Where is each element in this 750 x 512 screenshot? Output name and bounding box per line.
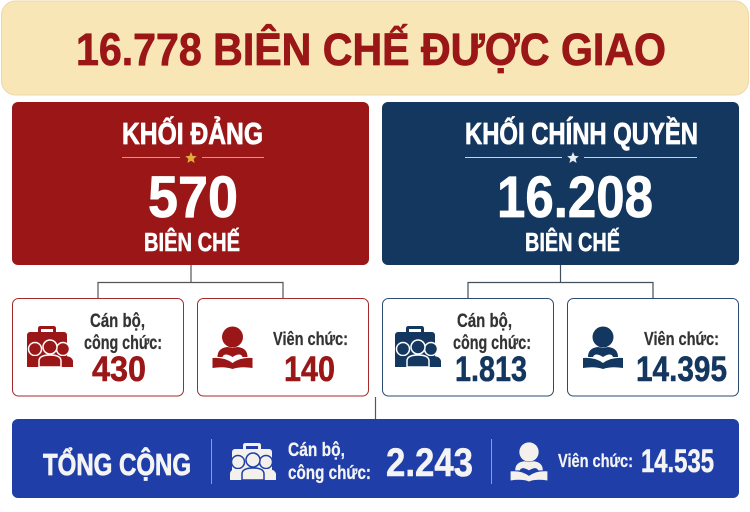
number: 570: 570 (148, 165, 238, 230)
card: Chính quyền viên chức (568, 298, 738, 396)
value: 2.243 (386, 441, 473, 485)
label: biên chế: BIÊN CHẾ (144, 227, 240, 257)
star divider (122, 152, 264, 163)
icon: briefcase with people (230, 443, 276, 480)
connector: Khối Đảng (98, 265, 283, 298)
icon: reader (583, 326, 623, 369)
label: công chức: (84, 333, 162, 354)
value: 430 (92, 350, 146, 389)
connector: total (374, 397, 376, 419)
label (84, 311, 162, 354)
icon: reader (212, 326, 252, 369)
card: Chính quyền cán bộ công chức (382, 298, 554, 396)
label (288, 439, 371, 484)
divider (211, 439, 212, 484)
panel: Khối Chính quyền (382, 102, 739, 265)
label: biên chế: BIÊN CHẾ (525, 227, 620, 257)
card: Đảng viên chức (198, 298, 368, 396)
panel: total bar (12, 419, 739, 498)
divider (491, 439, 492, 484)
panel: Khối Đảng (12, 102, 369, 265)
label: Cán bộ, (457, 311, 512, 332)
value: 14.395 (636, 350, 727, 389)
label: Cán bộ, (288, 439, 345, 461)
value: 1.813 (455, 350, 527, 389)
heading: Tổng cộng: TỔNG CỘNG (43, 446, 191, 482)
star divider (465, 152, 697, 163)
number: 16.208: 16.208 (497, 165, 653, 230)
connector: Khối Chính quyền (468, 265, 653, 298)
label: công chức: (288, 462, 371, 484)
label: Viên chức: (644, 328, 719, 349)
label: Viên chức: (273, 328, 348, 349)
label: Cán bộ, (90, 311, 145, 332)
title banner (2, 1, 748, 95)
label: Viên chức: (558, 451, 633, 471)
value: 14.535 (641, 443, 714, 479)
icon: reader (511, 442, 547, 481)
heading: Khối Đảng: KHỐI ĐẢNG (122, 115, 263, 151)
label: công chức: (453, 333, 531, 354)
title: 16.778 BIÊN CHẾ ĐƯỢC GIAO (76, 24, 666, 75)
label (453, 311, 531, 354)
icon: briefcase with people (27, 326, 73, 367)
card: Đảng cán bộ công chức (12, 298, 184, 396)
value: 140 (284, 350, 335, 389)
icon: briefcase with people (395, 326, 441, 367)
